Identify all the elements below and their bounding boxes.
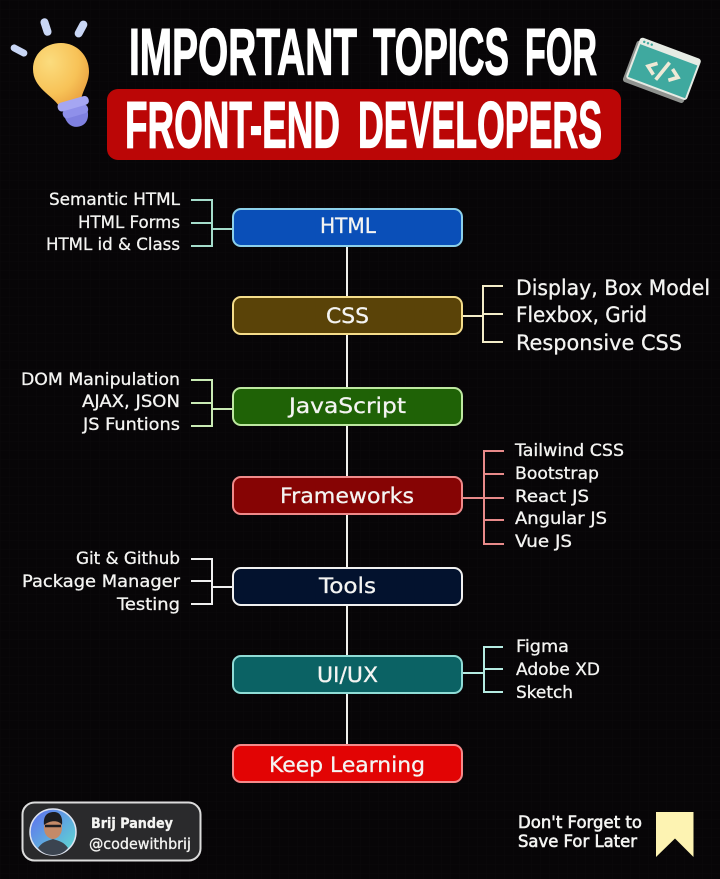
- text: Frameworks subtopics: Angular JS: [515, 509, 607, 529]
- save reminder text: Save For Later: [518, 832, 637, 852]
- box: JavaScript: JavaScript: [287, 394, 406, 418]
- text: UI/UX subtopics: [516, 637, 600, 703]
- text: Tools subtopics: Package Manager: [22, 572, 180, 592]
- box: Frameworks: [233, 477, 462, 514]
- text: JavaScript subtopics: JS Funtions: [82, 415, 180, 435]
- text: UI/UX subtopics: Figma: [516, 637, 569, 657]
- text: CSS subtopics: Responsive CSS: [516, 331, 682, 355]
- bracket: Frameworks subtopics: [462, 451, 504, 544]
- title line one: TOPICS: [373, 14, 509, 88]
- avatar: [30, 809, 76, 855]
- text: HTML subtopics: Semantic HTML: [49, 190, 181, 210]
- text: CSS subtopics: Display, Box Model: [516, 276, 710, 300]
- bracket: UI/UX subtopics: [462, 647, 503, 692]
- text: JavaScript subtopics: DOM Manipulation: [21, 370, 180, 390]
- author card: [22, 802, 200, 860]
- central connector line: [346, 246, 348, 745]
- box: UI/UX: [233, 656, 462, 693]
- text: JavaScript subtopics: [21, 370, 180, 435]
- icon: bookmark: [656, 812, 694, 857]
- icon: light bulb: [9, 17, 95, 131]
- text: Frameworks subtopics: [514, 441, 624, 552]
- box: JavaScript: [233, 388, 462, 425]
- title line one: FOR: [525, 14, 597, 88]
- box: UI/UX: UI/UX: [317, 663, 378, 687]
- text: UI/UX subtopics: Sketch: [516, 683, 573, 703]
- box: CSS: CSS: [326, 304, 369, 328]
- text: Frameworks subtopics: Tailwind CSS: [514, 441, 624, 461]
- box: HTML: [233, 209, 462, 246]
- box: Keep Learning: [233, 745, 462, 782]
- box: Tools: [233, 568, 462, 605]
- text: HTML subtopics: HTML Forms: [78, 213, 180, 233]
- box: Tools: Tools: [318, 574, 376, 598]
- author card: Brij Pandey: [91, 816, 173, 832]
- icon: code window: [622, 36, 702, 105]
- author card: @codewithbrij: [89, 835, 191, 853]
- bracket: JavaScript subtopics: [191, 380, 233, 426]
- text: HTML subtopics: [46, 190, 181, 255]
- text: JavaScript subtopics: AJAX, JSON: [82, 392, 180, 412]
- bracket: CSS subtopics: [462, 286, 503, 342]
- text: CSS subtopics: [516, 276, 710, 355]
- text: UI/UX subtopics: Adobe XD: [516, 660, 600, 680]
- box: Frameworks: Frameworks: [280, 484, 414, 508]
- box: HTML: HTML: [320, 214, 376, 238]
- text: Frameworks subtopics: React JS: [515, 487, 589, 507]
- save reminder text: Don't Forget to: [518, 813, 642, 833]
- box: Keep Learning: Keep Learning: [269, 753, 425, 777]
- text: Tools subtopics: [22, 549, 180, 615]
- text: Tools subtopics: Git & Github: [76, 549, 180, 569]
- bracket: Tools subtopics: [191, 559, 233, 604]
- title line one: IMPORTANT: [129, 14, 357, 88]
- text: HTML subtopics: HTML id & Class: [46, 235, 180, 255]
- text: Frameworks subtopics: Bootstrap: [515, 464, 599, 484]
- box: CSS: [233, 297, 462, 334]
- save reminder text: [518, 813, 642, 852]
- text: Frameworks subtopics: Vue JS: [515, 532, 572, 552]
- text: CSS subtopics: Flexbox, Grid: [516, 303, 647, 327]
- bracket: HTML subtopics: [191, 200, 233, 246]
- title line two on red banner: FRONT-END: [125, 88, 340, 162]
- text: Tools subtopics: Testing: [116, 595, 180, 615]
